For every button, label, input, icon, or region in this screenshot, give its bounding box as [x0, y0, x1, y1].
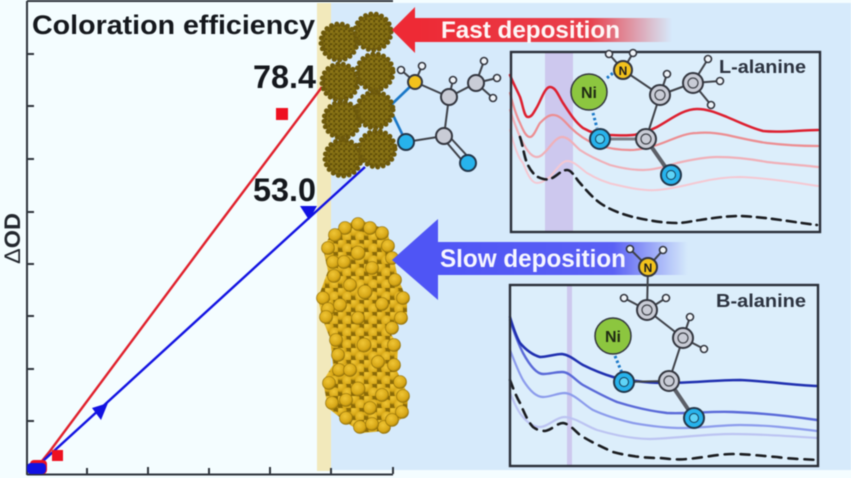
reference dashed curve — [520, 137, 817, 225]
spectra curves: L-alanine — [510, 75, 818, 225]
label: slow deposition: Slow deposition — [440, 245, 626, 273]
chart axes — [27, 1, 393, 475]
value: 53.0: 53.0 — [253, 172, 316, 208]
molecule: L-alanine attached to film — [391, 58, 500, 171]
panel: L-alanine spectra — [510, 50, 820, 232]
series: B-alanine blue line — [36, 167, 365, 468]
spectra curves: B-alanine — [510, 317, 817, 460]
y axis label: ΔOD — [0, 213, 25, 264]
arrow: slow deposition — [392, 219, 688, 300]
molecule: L-alanine bound to Ni — [571, 50, 724, 185]
molecule: L-alanine bound to Ni: N — [619, 64, 627, 78]
highlighted absorption band — [567, 285, 572, 466]
reference dashed curve — [510, 380, 817, 460]
molecule: B-alanine bound to Ni: Ni — [605, 329, 621, 346]
nanoparticle film: slow deposition dense rod — [316, 218, 410, 434]
series: L-alanine red line — [38, 87, 322, 466]
label: B-alanine: B-alanine — [716, 291, 806, 311]
chart: coloration efficiency — [0, 1, 393, 475]
molecule: L-alanine bound to Ni: Ni — [581, 85, 597, 102]
blue data points — [27, 206, 317, 474]
background: electrode strip — [317, 3, 331, 471]
molecule: B-alanine bound to Ni — [595, 246, 708, 428]
value: 78.4: 78.4 — [253, 59, 316, 95]
background: light blue field — [331, 3, 851, 470]
red data points — [30, 108, 288, 474]
frame — [510, 285, 818, 466]
nanoparticle film: fast deposition porous clusters — [321, 14, 395, 176]
molecule: B-alanine bound to Ni: N — [644, 261, 652, 275]
arrow: fast deposition — [392, 7, 672, 53]
label: fast deposition: Fast deposition — [441, 17, 620, 44]
panel: B-alanine spectra — [510, 246, 818, 466]
label: L-alanine: L-alanine — [719, 57, 806, 77]
frame — [511, 52, 820, 232]
highlighted absorption band — [545, 52, 573, 232]
title: Coloration efficiency — [32, 10, 315, 40]
